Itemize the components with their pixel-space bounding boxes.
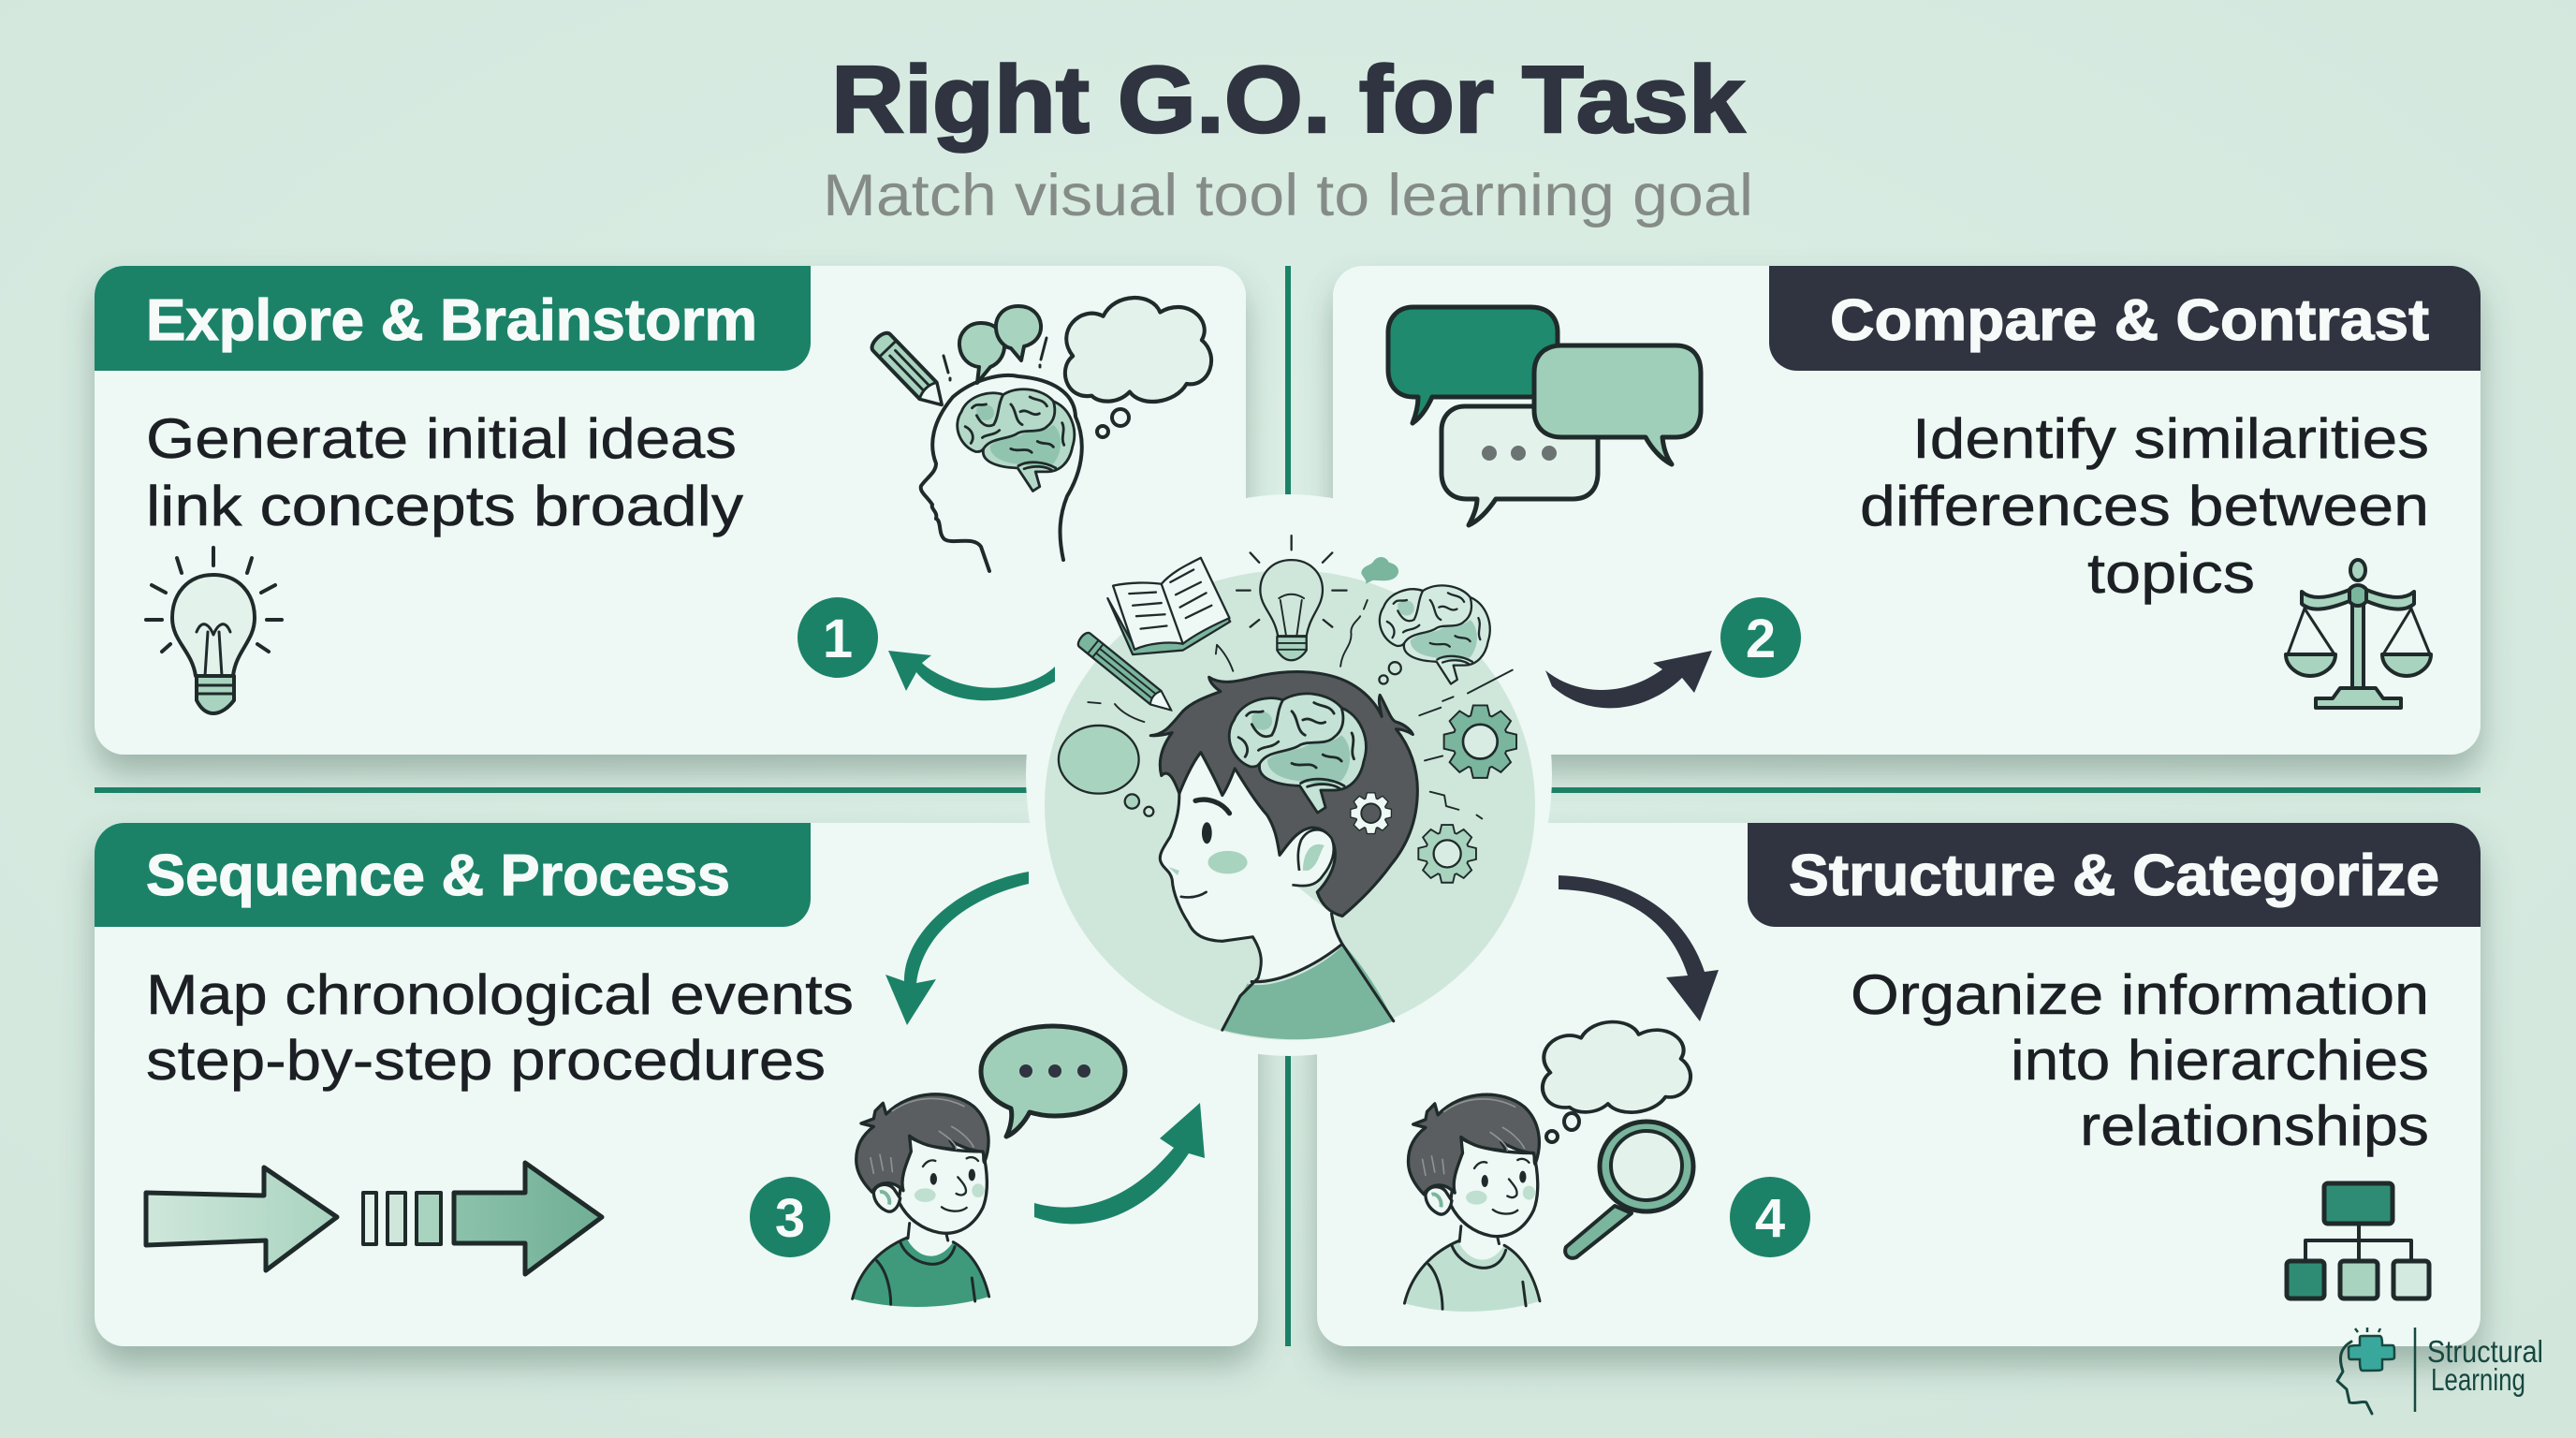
number badge 2 [1720,597,1801,678]
number badge 3 [750,1177,830,1257]
number badge 2: 2 [1746,609,1776,669]
panel heading: Explore & Brainstorm [146,288,757,353]
panel text: link concepts broadly [146,475,743,537]
icon: light bulb [146,548,282,713]
gear small [1418,825,1476,883]
panel text [146,407,743,537]
small cloud [1361,557,1398,584]
panel text: Organize information [1851,963,2429,1026]
panel heading [1748,823,2481,927]
logo: Structural Learning [2337,1328,2543,1414]
inner disc [1045,570,1535,1040]
number badge 1: 1 [823,609,853,669]
arrow: upward curve [1034,1103,1205,1224]
panel background [95,266,1246,755]
number badge 1 [798,597,878,678]
arrow to panel 3 [886,872,1029,1025]
shirt [1222,945,1394,1039]
icon: head with brain and thought bubbles [869,298,1211,571]
icon: balance scales [2286,560,2431,708]
panel text: differences between [1860,475,2429,537]
number badge 4 [1730,1177,1810,1257]
illustration: child thinking with magnifier [1404,1022,1693,1312]
logo text: Structural [2427,1334,2543,1369]
facial features [1168,800,1248,897]
panel: explore and brainstorm [95,266,1246,755]
panel background [1333,266,2481,755]
logo mark [2337,1328,2415,1414]
panel text: Generate initial ideas [146,407,737,470]
body outline [1160,794,1394,1030]
panel heading: Structure & Categorize [1789,844,2439,908]
number badge 4: 4 [1755,1188,1785,1249]
divider lines [95,266,2481,1346]
halo [1026,494,1552,1056]
thought dots [1379,662,1401,684]
arrow to panel 2 [1545,651,1712,708]
panel text: step-by-step procedures [146,1029,826,1092]
panel heading [95,266,811,371]
number badge 3: 3 [775,1188,805,1249]
title: Right G.O. for Task [831,48,1746,153]
pencil [1076,631,1177,717]
ear [1292,829,1334,886]
sketch lines [1088,600,1513,818]
central circle with child [1026,494,1552,1056]
face [1160,747,1342,978]
panel heading: Compare & Contrast [1830,288,2429,353]
panel: compare and contrast [1333,266,2481,755]
panel text: into hierarchies [2011,1029,2429,1092]
bulb [1237,536,1347,660]
brain above [1380,585,1490,684]
subtitle: Match visual tool to learning goal [823,163,1753,228]
logo text [2427,1334,2543,1397]
panel text [1860,407,2429,605]
panel heading: Sequence & Process [146,844,730,908]
panel text: relationships [2080,1094,2429,1157]
book [1107,558,1230,654]
icon: hierarchy chart [2287,1183,2429,1299]
panel: sequence and process [95,823,1258,1346]
panel background [95,823,1258,1346]
hair [1150,672,1417,917]
gear on hair [1351,793,1391,833]
arrow to panel 4 [1559,875,1719,1021]
thought bubble left [1059,726,1153,816]
gear large [1444,705,1516,778]
icon: process arrows [146,1163,602,1274]
panel: structure and categorize [1317,823,2481,1346]
panel text: Map chronological events [146,963,854,1026]
panel text: Identify similarities [1912,407,2429,470]
panel heading [1769,266,2481,371]
panel text [1851,963,2429,1157]
arrow to panel 1 [888,651,1055,700]
illustration: child speaking [853,1026,1125,1307]
brain in head [1229,694,1366,813]
icon: overlapping speech bubbles [1388,307,1701,525]
child illustration [1059,536,1516,1039]
logo text: Learning [2431,1362,2525,1397]
panel text [146,963,854,1092]
panel text: topics [2087,542,2255,605]
panel heading [95,823,811,927]
panel background [1317,823,2481,1346]
